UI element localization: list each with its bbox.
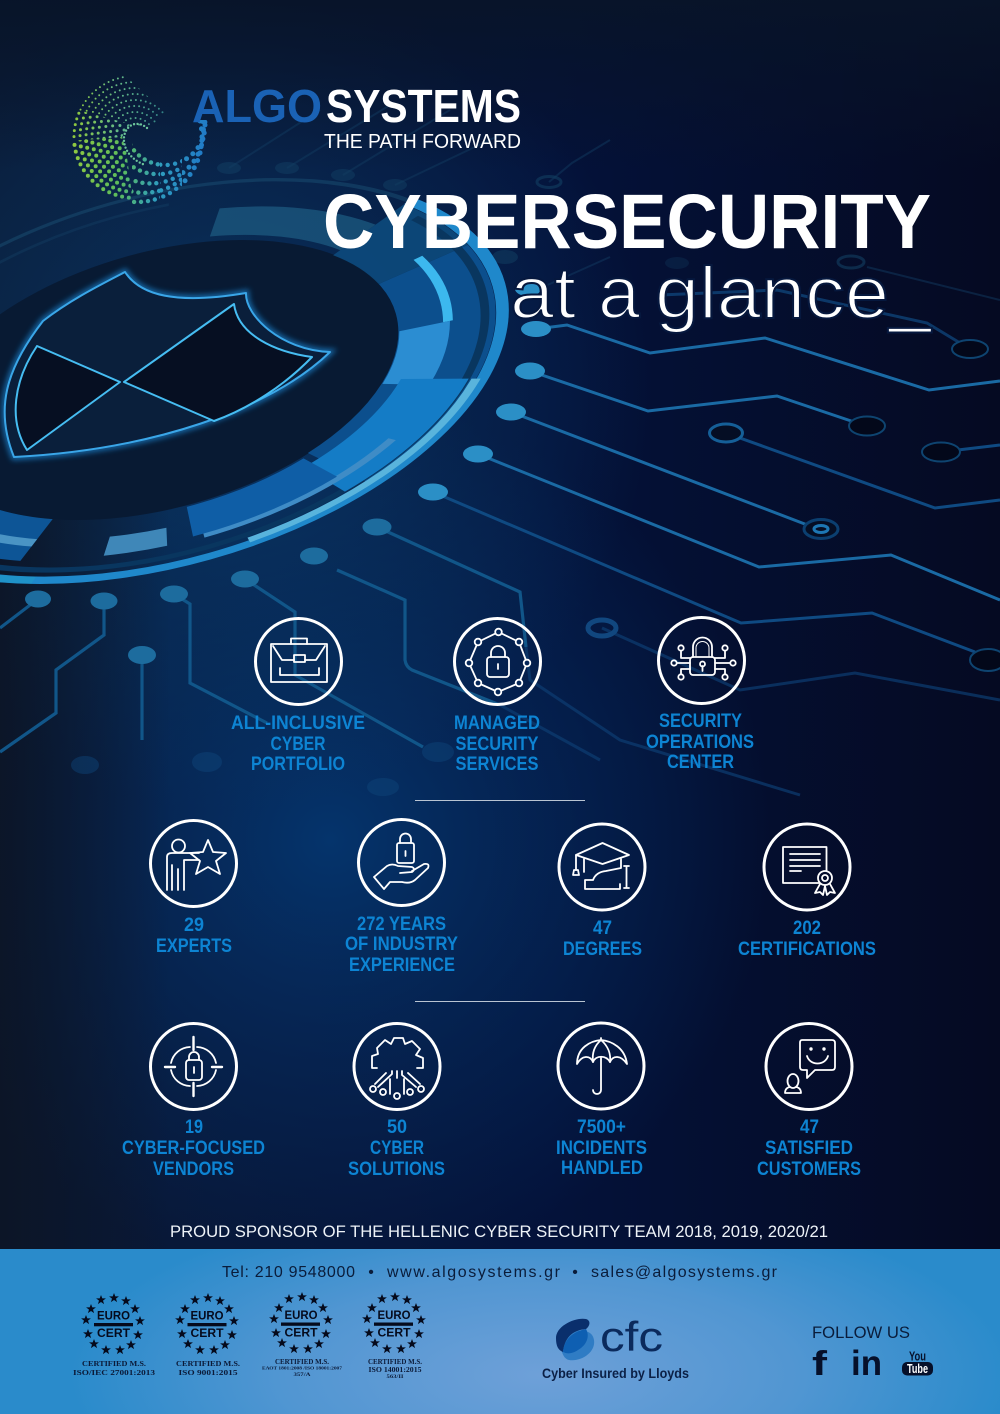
service: managed security services: SECURITY <box>456 733 538 755</box>
icon: youtube: You <box>909 1348 926 1364</box>
stat: 272 years of industry experience <box>345 820 458 976</box>
certification badge: ISO 9001: CERT <box>190 1326 224 1340</box>
icon: gear with circuits <box>370 1038 424 1099</box>
stat: 47 degrees <box>559 824 645 960</box>
stat: 47 degrees: DEGREES <box>563 938 642 960</box>
icon: graduation cap <box>573 843 629 889</box>
stat: 19 cyber-focused vendors: CYBER-FOCUSED <box>122 1137 265 1159</box>
stat: 50 cyber solutions: CYBER <box>370 1137 424 1159</box>
certification badge: ISO 9001: CERTIFIED M.S. <box>176 1359 240 1368</box>
certification badge: ISO 27001: ISO/IEC 27001:2013 <box>73 1368 155 1377</box>
certification badge: ISO 9001: EURO <box>190 1308 224 1322</box>
service: managed security services: SERVICES <box>456 753 538 775</box>
title: at <box>510 253 576 334</box>
icon: person with star <box>167 840 226 890</box>
service: managed security services: MANAGED <box>454 712 540 734</box>
service: security operations center: CENTER <box>667 751 734 773</box>
stat: 19 cyber-focused vendors: 19 <box>185 1116 203 1138</box>
certification badge: ELOT 1801: ΕΛΟΤ 1801:2008 /ISO 18001:2007 <box>262 1366 343 1370</box>
title: CYBERSECURITY <box>323 179 931 265</box>
stat: 272 years of industry experience: OF INDUSTRY <box>345 933 458 955</box>
certification badge: ELOT 1801: EURO <box>284 1308 318 1322</box>
certification badge: ELOT 1801: CERTIFIED M.S. <box>275 1358 329 1366</box>
contact line: • <box>572 1264 578 1281</box>
certification badge: ISO 14001: 563/II <box>386 1374 404 1380</box>
icon: facebook: f <box>812 1345 828 1383</box>
divider <box>415 1001 585 1002</box>
stat: 19 cyber-focused vendors <box>122 1024 265 1180</box>
certification badge: ISO 14001 <box>362 1292 426 1380</box>
icon: briefcase <box>271 638 327 682</box>
cfc logo: cfc <box>600 1313 663 1360</box>
title <box>323 179 932 334</box>
certification badge: ISO 27001 <box>73 1293 155 1377</box>
icon: youtube <box>902 1348 933 1376</box>
certification badge: ISO 27001: CERT <box>97 1326 131 1340</box>
logo wordmark: THE PATH FORWARD <box>324 131 521 153</box>
logo wordmark: SYSTEMS <box>326 80 521 132</box>
certification badge: ISO 27001: EURO <box>97 1308 130 1322</box>
divider <box>415 800 585 801</box>
icon: umbrella <box>577 1038 627 1094</box>
stat: 47 satisfied customers: SATISFIED <box>765 1137 853 1159</box>
icon: certificate <box>783 847 835 895</box>
icon: target lock <box>165 1037 222 1096</box>
stat: 50 cyber solutions <box>348 1024 445 1180</box>
circuit traces upper right <box>0 105 1000 795</box>
stat: 272 years of industry experience: EXPERIENCE <box>349 954 455 976</box>
follow us: FOLLOW US <box>812 1323 910 1342</box>
stat: 47 degrees: 47 <box>593 917 612 939</box>
certification badge: ISO 14001: ISO 14001:2015 <box>368 1366 422 1374</box>
stat: 47 satisfied customers: CUSTOMERS <box>757 1158 861 1180</box>
stat: 47 satisfied customers: 47 <box>800 1116 819 1138</box>
logo wordmark: ALGO <box>192 80 322 132</box>
stat: 7500+ incidents handled <box>556 1023 647 1179</box>
stat: 7500+ incidents handled: INCIDENTS <box>556 1137 647 1159</box>
stat: 29 experts: EXPERTS <box>156 935 232 957</box>
stat: 7500+ incidents handled: HANDLED <box>561 1157 643 1179</box>
service: all-inclusive cyber portfolio: CYBER <box>270 733 326 755</box>
certification badge: ISO 14001: CERT <box>378 1326 411 1340</box>
icon: network lock <box>466 629 530 695</box>
icon: youtube: Tube <box>907 1362 928 1376</box>
icon: linkedin: in <box>851 1344 882 1383</box>
stat: 29 experts <box>150 820 236 957</box>
title: _ <box>887 253 932 334</box>
stat: 50 cyber solutions: 50 <box>387 1116 407 1138</box>
logo wordmark <box>192 80 521 153</box>
follow us <box>812 1323 933 1383</box>
certification badge: ELOT 1801 <box>262 1292 343 1378</box>
title: glance <box>655 253 889 334</box>
stat: 202 certifications: CERTIFICATIONS <box>738 938 876 960</box>
logo swirl <box>72 72 205 202</box>
stat: 19 cyber-focused vendors: VENDORS <box>153 1158 234 1180</box>
service: managed security services <box>454 618 540 775</box>
stat: 202 certifications <box>738 824 876 960</box>
footer panel <box>0 1249 1000 1414</box>
service: security operations center <box>646 618 754 773</box>
cyber ring dial <box>0 109 548 651</box>
icon: circuit lock <box>671 638 736 680</box>
certification badge: ISO 27001: CERTIFIED M.S. <box>82 1359 146 1368</box>
stat: 50 cyber solutions: SOLUTIONS <box>348 1158 445 1180</box>
cfc logo <box>542 1313 689 1381</box>
certification badge: ELOT 1801: 357/A <box>294 1372 311 1378</box>
stat: 29 experts: 29 <box>184 914 204 936</box>
circuit nodes <box>25 162 1000 796</box>
contact line: sales@algosystems.gr <box>591 1264 778 1281</box>
icon: person with smile speech bubble <box>785 1040 835 1093</box>
certification badge: ISO 9001: ISO 9001:2015 <box>178 1368 238 1377</box>
service: all-inclusive cyber portfolio <box>231 618 365 775</box>
service: security operations center: SECURITY <box>659 710 742 732</box>
service: all-inclusive cyber portfolio: PORTFOLIO <box>251 753 345 775</box>
contact line: Tel: 210 9548000 <box>222 1264 355 1281</box>
certification badge: ISO 14001: CERTIFIED M.S. <box>368 1358 422 1366</box>
title: a <box>598 253 640 334</box>
certification badge: ISO 9001 <box>175 1293 240 1377</box>
service: security operations center: OPERATIONS <box>646 731 754 753</box>
cfc logo: Cyber Insured by Lloyds <box>542 1366 689 1381</box>
contact line <box>222 1264 778 1281</box>
certification badge: ISO 14001: EURO <box>378 1308 410 1322</box>
stat: 272 years of industry experience: 272 YEARS <box>357 913 446 935</box>
shield icon <box>5 272 330 457</box>
stat: 47 satisfied customers <box>757 1024 861 1180</box>
stat: 7500+ incidents handled: 7500+ <box>577 1116 626 1138</box>
sponsor line: PROUD SPONSOR OF THE HELLENIC CYBER SECURITY TEAM 2018, 2019, 2020/21 <box>170 1223 828 1241</box>
service: all-inclusive cyber portfolio: ALL-INCLUSIVE <box>231 712 365 734</box>
stat: 202 certifications: 202 <box>793 917 821 939</box>
icon: hand holding lock <box>374 834 428 889</box>
certification badge: ELOT 1801: CERT <box>284 1326 318 1340</box>
contact line: • <box>368 1264 374 1281</box>
contact line: www.algosystems.gr <box>386 1264 561 1281</box>
